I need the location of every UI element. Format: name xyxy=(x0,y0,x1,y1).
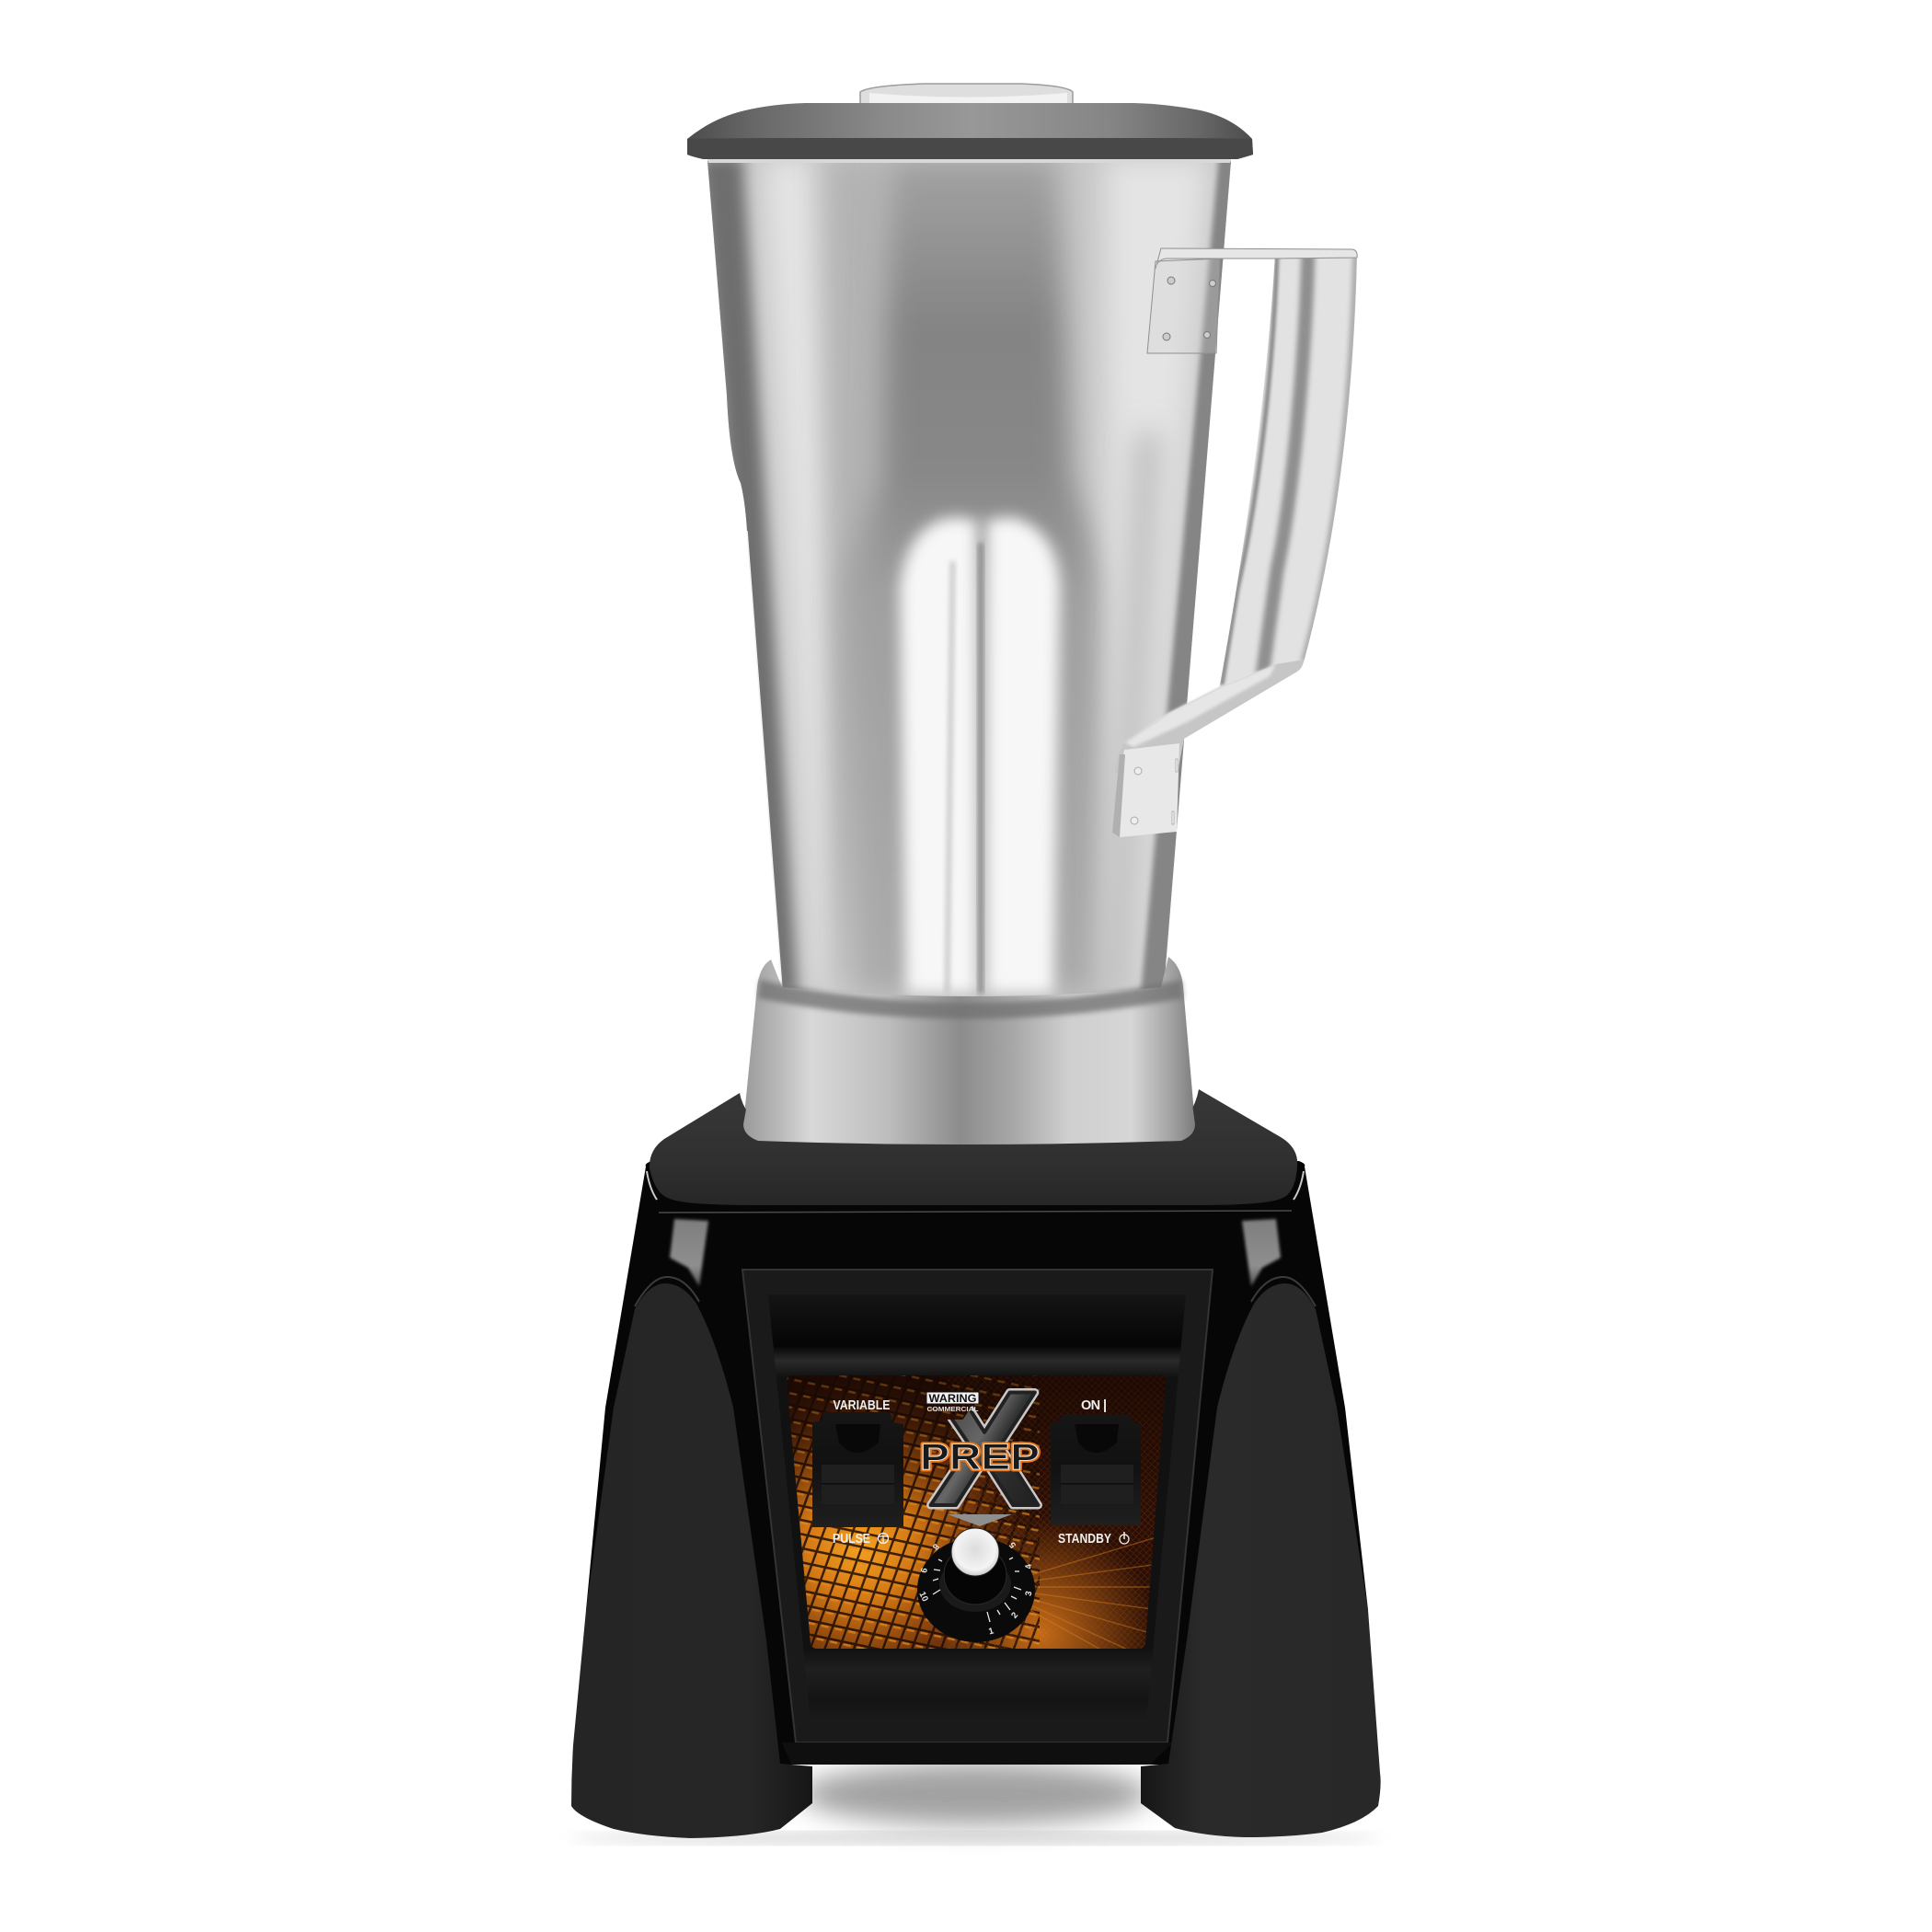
lower mounting plate xyxy=(1112,743,1179,837)
pulse label: PULSE xyxy=(833,1532,870,1547)
centre dark area xyxy=(846,156,1113,994)
on label: ON | xyxy=(1081,1398,1107,1413)
top rubber pad xyxy=(650,1089,1297,1205)
dial numbers xyxy=(916,1539,1034,1637)
ground shadow xyxy=(570,1763,1380,1845)
dial numbers: 5 xyxy=(1007,1539,1018,1550)
mid tone band xyxy=(828,156,888,994)
handle lower strap xyxy=(1115,660,1304,773)
handle arm xyxy=(1214,248,1362,690)
control recess xyxy=(768,1294,1186,1721)
variable label: VARIABLE xyxy=(834,1398,891,1413)
right foot xyxy=(1141,1277,1381,1837)
waring commercial logo: WARING xyxy=(929,1392,977,1405)
collar bottom redraw xyxy=(743,1104,1195,1144)
dial numbers: 2 xyxy=(1009,1610,1020,1621)
foot gloss rim xyxy=(635,1277,699,1306)
arch reflection right xyxy=(986,517,1060,994)
prep logo: PREP xyxy=(920,1437,1040,1478)
dial numbers: 4 xyxy=(1023,1562,1034,1570)
dial numbers: 8 xyxy=(930,1541,941,1552)
blender jar xyxy=(699,156,1242,1003)
fan lines xyxy=(1030,1537,1154,1649)
dial numbers: 10 xyxy=(916,1591,930,1604)
dial numbers: 3 xyxy=(1024,1591,1034,1597)
right rocker switch xyxy=(1051,1414,1141,1525)
handle xyxy=(1112,248,1362,837)
upper mounting plate xyxy=(1147,259,1220,353)
prep logo: PREP xyxy=(920,1437,1040,1478)
body rim lines xyxy=(659,1211,1292,1213)
gloss highlight left xyxy=(670,1219,708,1286)
foot gloss rim xyxy=(1251,1277,1316,1306)
speed dial xyxy=(916,1528,1035,1642)
handle top strip xyxy=(1156,248,1357,269)
right bright band xyxy=(1104,156,1210,994)
dial numbers: 9 xyxy=(918,1567,928,1573)
standby label: STANDBY xyxy=(1058,1532,1111,1547)
lid xyxy=(687,103,1253,159)
underside xyxy=(782,1742,1173,1765)
left foot xyxy=(571,1277,812,1838)
lid knob xyxy=(860,84,1073,105)
x logo: X xyxy=(929,1357,1040,1540)
upper shading xyxy=(787,1375,1166,1507)
x logo: X xyxy=(929,1357,1040,1540)
waring commercial logo: COMMERCIAL xyxy=(927,1407,979,1413)
chevron xyxy=(948,1514,1012,1526)
right side fold xyxy=(1109,432,1157,994)
black body xyxy=(586,1161,1368,1765)
dial numbers: 1 xyxy=(987,1626,995,1637)
motor base xyxy=(586,1089,1368,1765)
orange glow xyxy=(788,1384,1030,1649)
arch centre lines xyxy=(978,543,983,994)
collar xyxy=(743,957,1195,1144)
gloss highlight right xyxy=(1242,1219,1281,1286)
left bright band xyxy=(762,156,851,994)
x logo xyxy=(926,1388,1042,1509)
left rocker switch xyxy=(812,1412,903,1527)
pad silver edge xyxy=(647,1171,657,1200)
jar rim xyxy=(707,159,1231,163)
left dark edge xyxy=(699,156,799,994)
waring commercial logo xyxy=(926,1392,979,1413)
control label xyxy=(787,1375,1166,1649)
right edge xyxy=(1141,156,1237,994)
dial cap xyxy=(951,1528,999,1576)
dial ticks xyxy=(933,1558,1021,1622)
arch reflection left xyxy=(900,517,977,994)
control frame xyxy=(742,1270,1213,1742)
mesh pattern xyxy=(782,1371,1040,1656)
